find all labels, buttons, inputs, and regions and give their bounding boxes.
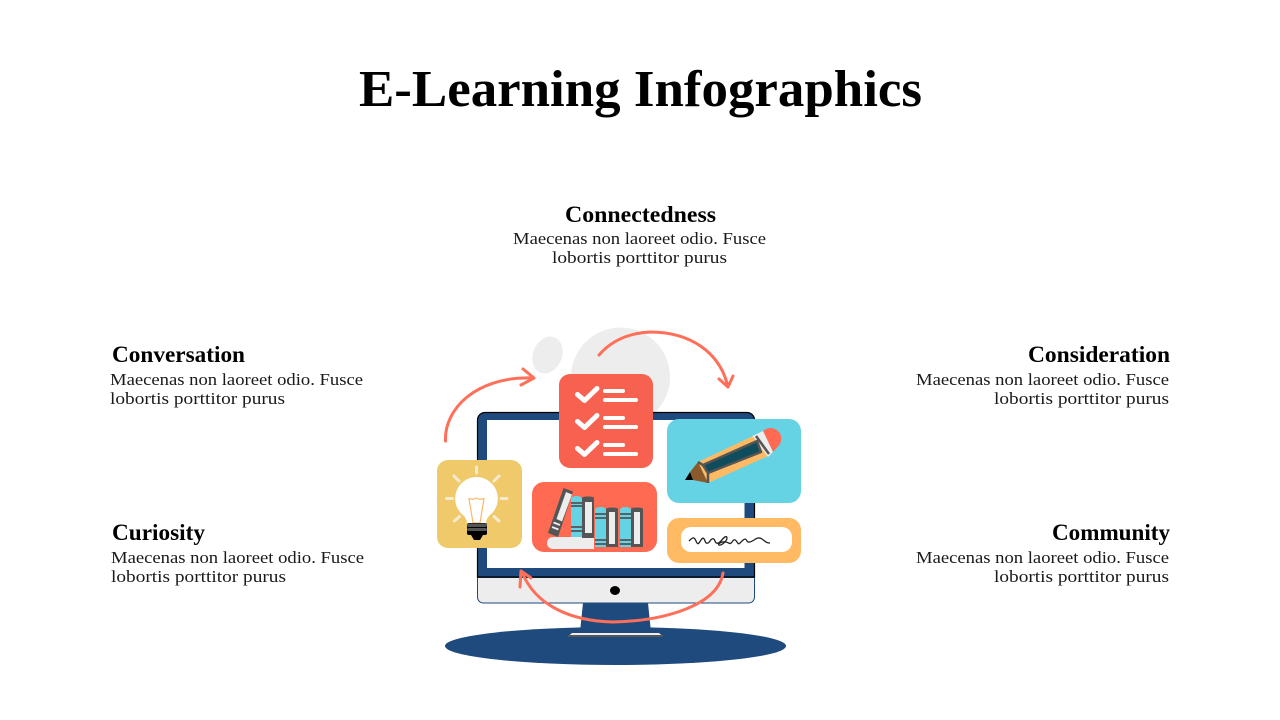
- text block: Curiosity: [111, 520, 364, 586]
- text block: Consideration: Consideration: [1028, 342, 1170, 367]
- text block: Consideration: Maecenas non laoreet odio. Fusce: [916, 370, 1169, 389]
- text block: Connectedness: lobortis porttitor purus: [552, 248, 727, 267]
- book 1: [571, 496, 594, 538]
- text block: Community: Maecenas non laoreet odio. Fusce: [916, 548, 1169, 567]
- monitor screen: [487, 420, 744, 568]
- arrow: checklist to pencil: [599, 332, 733, 387]
- text block: Conversation: lobortis porttitor purus: [110, 389, 285, 408]
- text block: Conversation: Conversation: [112, 342, 245, 367]
- text block: Curiosity: Maecenas non laoreet odio. Fusce: [111, 548, 364, 567]
- leaning book: [548, 488, 573, 537]
- card: signature: [667, 518, 801, 563]
- text block: Consideration: [916, 342, 1170, 408]
- text block: Connectedness: Connectedness: [565, 202, 716, 227]
- text block: Curiosity: lobortis porttitor purus: [111, 567, 286, 586]
- text block: Community: Community: [1052, 520, 1170, 545]
- arrow: signature to monitor: [520, 571, 723, 622]
- arrow: bulb to checklist: [445, 369, 534, 441]
- monitor stand: [580, 603, 651, 632]
- monitor frame: [478, 412, 754, 577]
- monitor chin: [478, 578, 754, 603]
- lying book: [547, 537, 594, 549]
- text block: Connectedness: Maecenas non laoreet odio. Fusce: [513, 229, 766, 248]
- text block: Consideration: lobortis porttitor purus: [994, 389, 1169, 408]
- text block: Community: lobortis porttitor purus: [994, 567, 1169, 586]
- text block: Community: [916, 520, 1170, 586]
- book 3: [620, 507, 643, 547]
- text block: Conversation: Maecenas non laoreet odio. Fusce: [110, 370, 363, 389]
- text block: Connectedness: [513, 202, 766, 267]
- card: pencil: [667, 419, 801, 503]
- book 2: [595, 507, 618, 547]
- background blobs: [527, 328, 670, 426]
- base ellipse: [445, 627, 786, 665]
- title: E-Learning Infographics: [359, 61, 922, 118]
- text block: Curiosity: Curiosity: [112, 520, 206, 545]
- camera dot: [610, 586, 620, 595]
- card: light bulb: [437, 460, 522, 548]
- card: checklist: [559, 374, 653, 468]
- monitor: [478, 412, 754, 637]
- text block: Conversation: [110, 342, 363, 408]
- monitor foot: [568, 633, 663, 637]
- card: books: [532, 482, 657, 552]
